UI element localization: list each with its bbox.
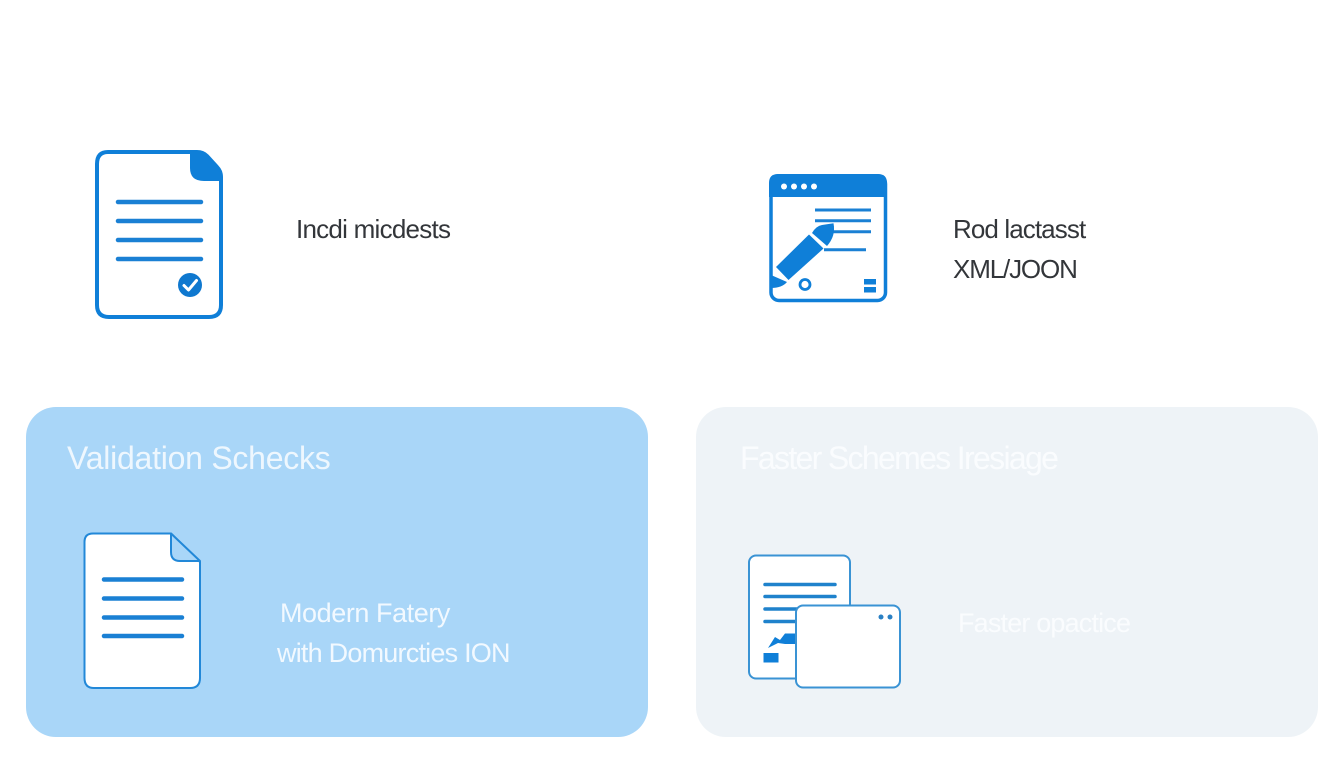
- text: XML/JSON label: XML/JOON: [953, 254, 1077, 284]
- text: modern factory: [277, 598, 510, 668]
- icon: document and window: [748, 554, 901, 688]
- text: modern factory: with Domurcties ION: [277, 638, 510, 668]
- text: incident label: Incdi micdests: [296, 214, 450, 244]
- panel: faster schemes: [696, 407, 1318, 737]
- icon: browser window with pen: [769, 174, 888, 302]
- text: XML/JSON label: [953, 214, 1086, 284]
- panel: validation checks: [26, 407, 648, 737]
- heading: validation checks: Validation Schecks: [67, 440, 330, 476]
- text: modern factory: Modern Fatery: [280, 598, 450, 628]
- text: faster opactice: Faster opactice: [958, 608, 1130, 638]
- icon: document on blue panel: [84, 532, 201, 689]
- text: XML/JSON label: Rod lactasst: [953, 214, 1085, 244]
- icon: document with check: [95, 150, 223, 319]
- heading: faster schemes: Faster Schemes Iresiage: [740, 440, 1057, 476]
